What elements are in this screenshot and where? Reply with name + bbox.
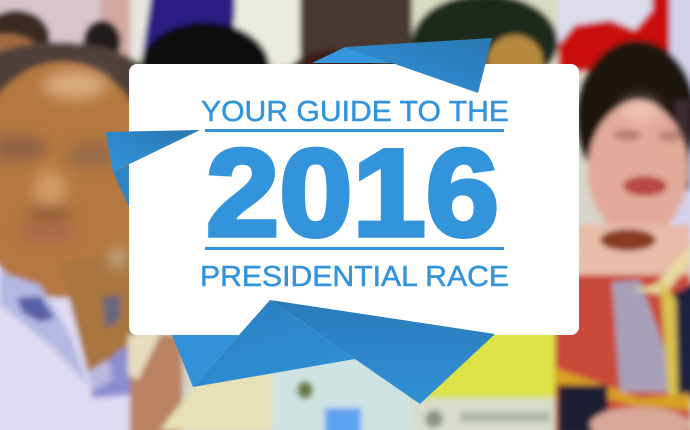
heading: 2016: 2016	[206, 124, 499, 262]
soft face highlights	[0, 71, 658, 268]
divider top	[205, 129, 504, 132]
ribbon: top right	[312, 38, 492, 93]
table	[160, 340, 275, 430]
panel: title card	[129, 64, 579, 335]
ribbon: bottom	[172, 300, 495, 404]
heading: your guide to the: YOUR GUIDE TO THE	[201, 96, 509, 128]
heading: presidential race: PRESIDENTIAL RACE	[200, 261, 509, 293]
woman	[577, 40, 690, 196]
ribbon: left	[106, 130, 200, 207]
man	[0, 250, 140, 430]
divider bottom	[205, 247, 504, 250]
